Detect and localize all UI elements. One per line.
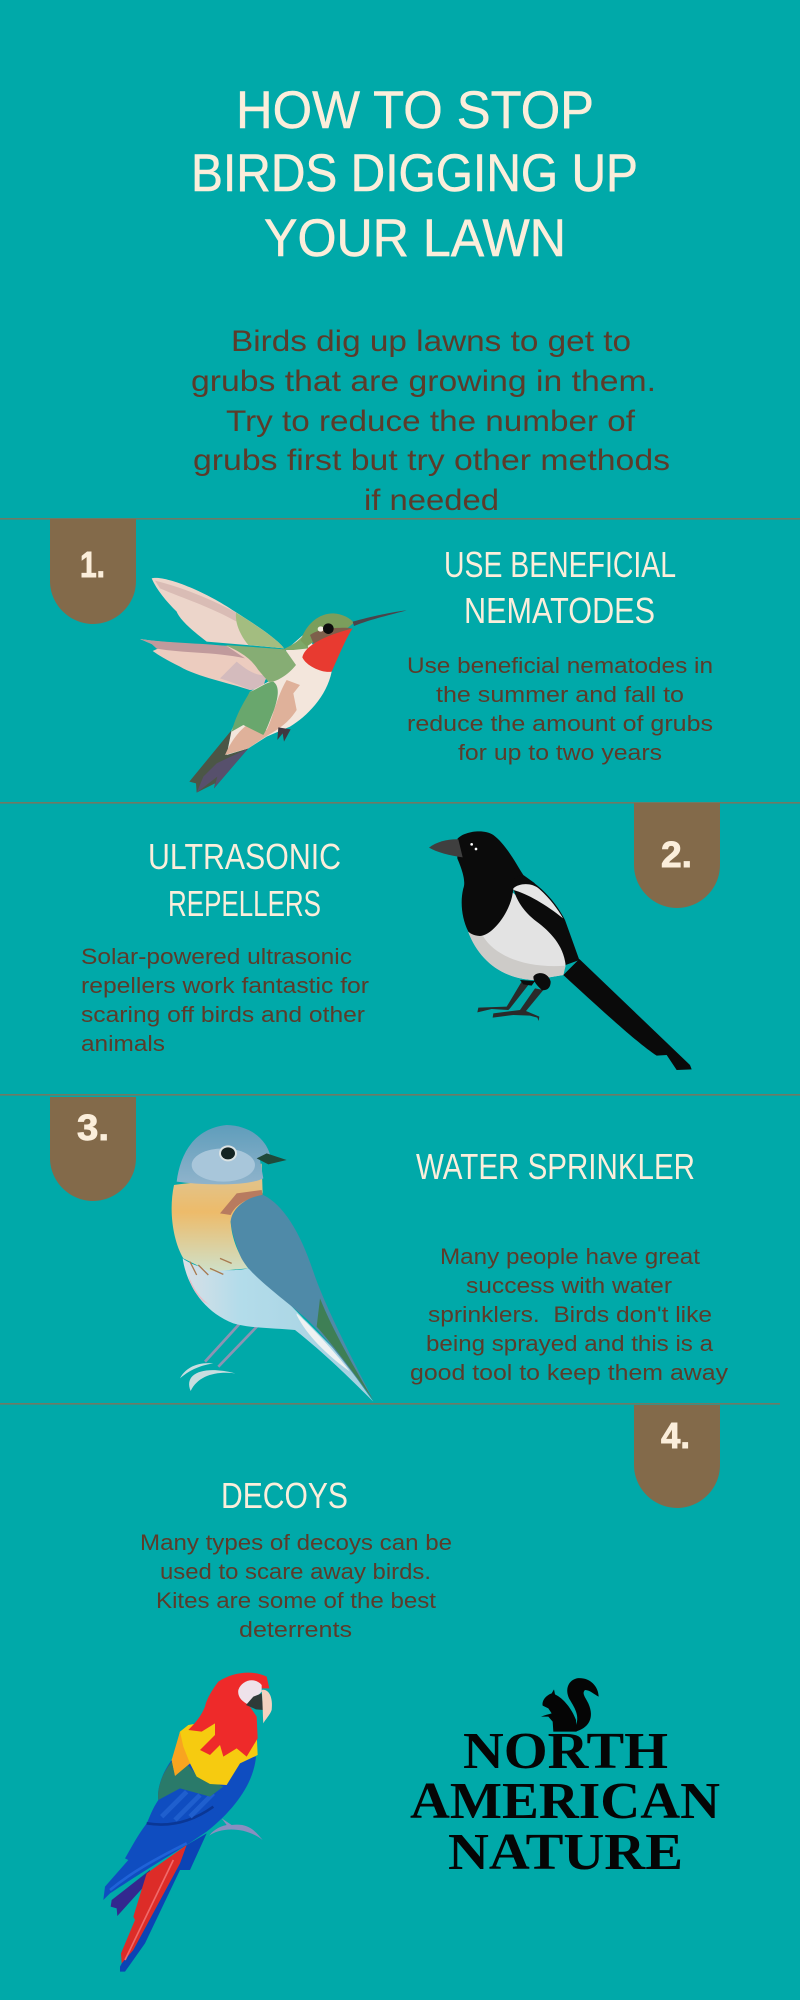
badge: step 4: 4. <box>661 1415 690 1456</box>
text: step 1 description <box>407 653 713 765</box>
title <box>191 81 638 268</box>
text: step 3 description: being sprayed and this is a <box>426 1331 714 1356</box>
title: BIRDS DIGGING UP <box>191 144 638 203</box>
icon: hummingbird <box>140 578 407 793</box>
text: step 4 description: deterrents <box>239 1617 352 1642</box>
title: HOW TO STOP <box>236 81 594 140</box>
text: step 4 description: Kites are some of the best <box>156 1588 436 1613</box>
text: step 3 description: success with water <box>466 1273 672 1298</box>
logo: north american nature: NORTH <box>463 1723 668 1780</box>
heading: use beneficial nematodes: USE BENEFICIAL <box>444 544 676 585</box>
text: step 2 description: scaring off birds and other <box>81 1002 365 1027</box>
logo: north american nature: AMERICAN <box>410 1773 720 1830</box>
badge: step 2 <box>634 803 720 908</box>
badge: step 3: 3. <box>77 1107 109 1148</box>
heading: use beneficial nematodes <box>444 544 676 631</box>
heading: ultrasonic repellers: ULTRASONIC <box>148 836 341 877</box>
intro text: grubs that are growing in them. <box>191 365 656 398</box>
panel: step 1 <box>50 519 713 793</box>
text: step 1 description: the summer and fall to <box>436 682 684 707</box>
text: step 1 description: for up to two years <box>458 740 662 765</box>
intro text: if needed <box>364 484 499 517</box>
text: step 2 description: animals <box>81 1031 165 1056</box>
badge: step 1 <box>50 519 136 624</box>
panel: step 3 <box>50 1097 728 1402</box>
badge: step 1: 1. <box>80 544 105 585</box>
heading: decoys: DECOYS <box>221 1475 348 1516</box>
badge: step 2: 2. <box>661 834 692 875</box>
text: step 1 description: Use beneficial nematodes in <box>407 653 713 678</box>
heading: use beneficial nematodes: NEMATODES <box>464 590 655 631</box>
panel: step 4 <box>103 1405 720 1972</box>
icon: magpie <box>429 831 692 1070</box>
icon: scarlet macaw <box>103 1673 272 1972</box>
text: step 4 description: Many types of decoys can be <box>140 1530 452 1555</box>
text: step 2 description: repellers work fantastic for <box>81 973 369 998</box>
intro text: Try to reduce the number of <box>226 405 636 438</box>
heading: ultrasonic repellers <box>148 836 341 924</box>
intro text: grubs first but try other methods <box>193 444 670 477</box>
heading: ultrasonic repellers: REPELLERS <box>168 883 321 924</box>
text: step 4 description <box>140 1530 452 1642</box>
text: step 3 description: Many people have great <box>440 1244 700 1269</box>
text: step 4 description: used to scare away birds. <box>160 1559 431 1584</box>
intro text: Birds dig up lawns to get to <box>231 325 631 358</box>
icon: squirrel <box>541 1678 599 1732</box>
logo: north american nature <box>410 1678 720 1881</box>
panel: step 2 <box>81 803 720 1070</box>
text: step 3 description: good tool to keep them away <box>410 1360 728 1385</box>
text: step 2 description: Solar-powered ultrasonic <box>81 944 352 969</box>
text: step 1 description: reduce the amount of grubs <box>407 711 713 736</box>
text: step 3 description: sprinklers. Birds don't like <box>428 1302 712 1327</box>
heading: water sprinkler: WATER SPRINKLER <box>416 1146 695 1187</box>
intro text <box>191 325 670 517</box>
badge: step 3 <box>50 1097 136 1201</box>
badge: step 4 <box>634 1405 720 1508</box>
logo: north american nature: NATURE <box>448 1824 683 1881</box>
icon: bluebird <box>172 1125 373 1402</box>
text: step 2 description <box>81 944 369 1056</box>
text: step 3 description <box>410 1244 728 1385</box>
title: YOUR LAWN <box>264 209 566 268</box>
